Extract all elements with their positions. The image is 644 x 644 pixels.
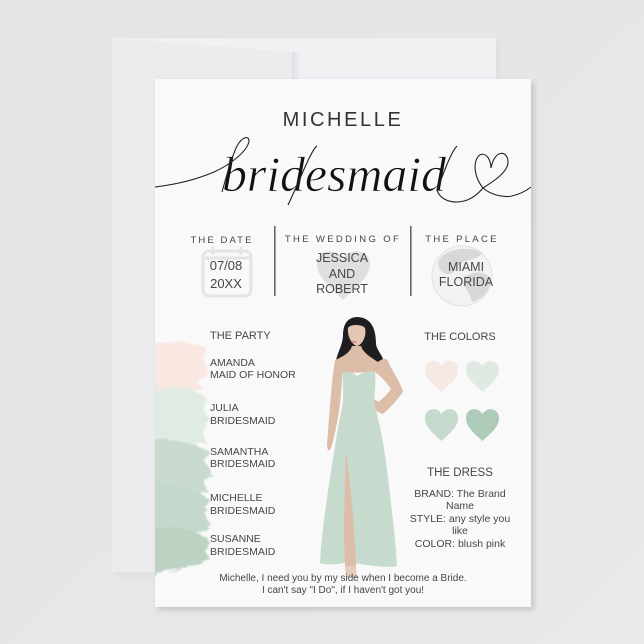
the party list: THE PARTY xyxy=(210,330,271,342)
card panel xyxy=(155,79,534,610)
the party list: BRIDESMAID xyxy=(210,546,276,558)
the dress details: COLOR: blush pink xyxy=(415,538,506,550)
brush strokes xyxy=(155,340,214,576)
the dress details: THE DRESS xyxy=(427,467,493,479)
the place block xyxy=(425,234,499,306)
lips xyxy=(352,341,356,343)
the party list: AMANDA xyxy=(210,357,255,369)
shoe xyxy=(345,566,357,578)
the wedding of block: AND xyxy=(329,267,355,281)
the party list: SAMANTHA xyxy=(210,446,268,458)
icon: heart xyxy=(317,251,370,300)
icon: calendar xyxy=(203,247,251,296)
the wedding of block xyxy=(285,234,401,300)
the date block: 20XX xyxy=(210,276,242,291)
script title: bridesmaid xyxy=(222,146,447,202)
the party list: MAID OF HONOR xyxy=(210,369,296,381)
the place block: FLORIDA xyxy=(439,275,494,289)
icon: globe xyxy=(432,246,492,306)
the place block: THE PLACE xyxy=(425,234,499,245)
closing message: I can't say "I Do", if I haven't got you! xyxy=(262,585,424,596)
the dress details: BRAND: The Brand xyxy=(414,488,506,500)
the dress details: Name xyxy=(446,500,474,512)
the place block: MIAMI xyxy=(448,260,484,274)
the party list: BRIDESMAID xyxy=(210,458,276,470)
envelope xyxy=(112,38,499,575)
the wedding of block: ROBERT xyxy=(316,282,368,296)
arms, shoulders and legs xyxy=(327,346,403,451)
the date block xyxy=(190,235,254,296)
the wedding of block: JESSICA xyxy=(316,251,369,265)
card scene xyxy=(112,38,536,612)
flourish and heart xyxy=(155,138,531,205)
the dress details: like xyxy=(452,525,468,537)
the party list: MICHELLE xyxy=(210,492,263,504)
closing message xyxy=(219,573,467,596)
name heading: MICHELLE xyxy=(283,109,403,131)
the party list: BRIDESMAID xyxy=(210,505,276,517)
the party list: SUSANNE xyxy=(210,533,261,545)
the wedding of block: THE WEDDING OF xyxy=(285,234,401,245)
heart: blush xyxy=(425,361,458,392)
the dress details: STYLE: any style you xyxy=(410,513,510,525)
the party list xyxy=(210,330,296,558)
the dress details xyxy=(410,467,510,550)
the date block: THE DATE xyxy=(190,235,254,246)
hair back xyxy=(336,317,384,369)
leg through slit xyxy=(344,450,356,566)
dress xyxy=(320,371,397,567)
bridesmaid figure xyxy=(320,317,403,578)
face xyxy=(348,325,365,346)
the date block: 07/08 xyxy=(210,258,242,273)
closing message: Michelle, I need you by my side when I become a Bride. xyxy=(219,573,467,584)
script title xyxy=(155,138,531,205)
the party list: BRIDESMAID xyxy=(210,415,276,427)
heart: deep sage xyxy=(466,409,499,441)
color hearts xyxy=(425,361,499,441)
the colors heading: THE COLORS xyxy=(424,331,496,343)
heart: sage xyxy=(425,409,458,441)
info row dividers xyxy=(274,226,412,296)
the party list: JULIA xyxy=(210,402,239,414)
heart: pale green xyxy=(466,361,499,392)
